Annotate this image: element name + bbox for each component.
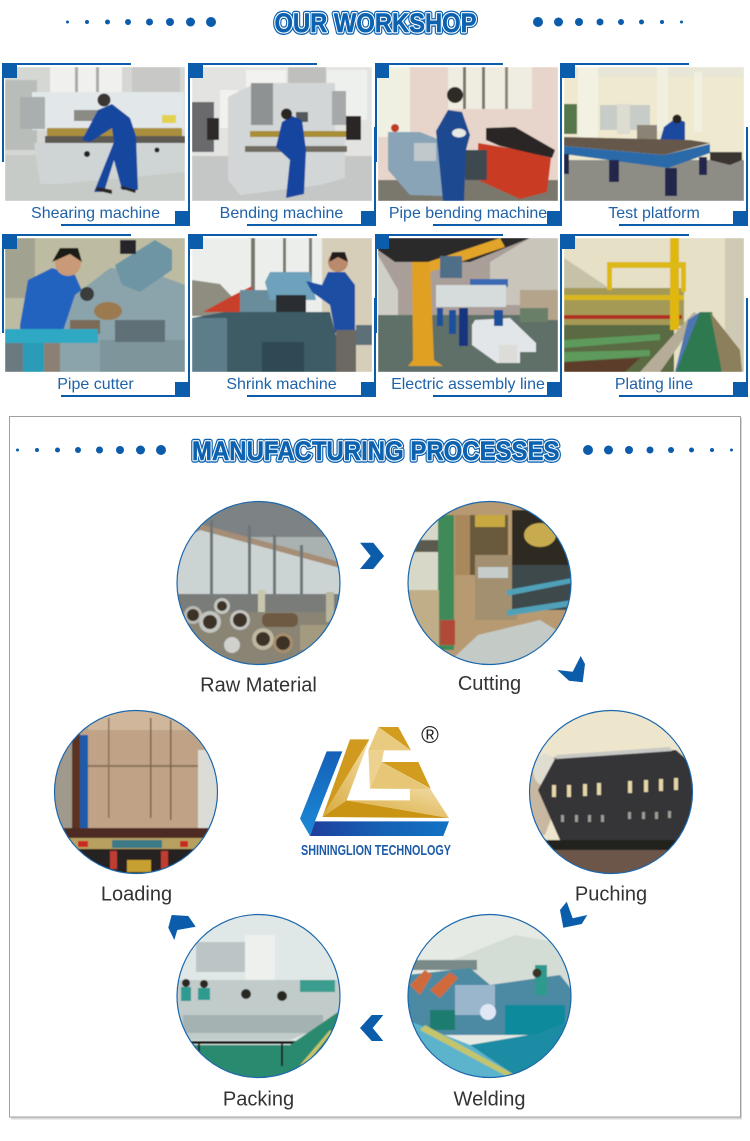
- caption: Electric assembly line: [391, 376, 545, 393]
- step: puching: [529, 710, 694, 906]
- card: bending machine: [188, 63, 376, 226]
- decorative dots: processes heading left: [16, 445, 166, 455]
- photo: electric assembly line: [378, 238, 558, 372]
- title: our workshop: OUR WORKSHOP: [274, 8, 476, 38]
- frame: electric assembly line: [375, 234, 562, 397]
- title: manufacturing processes: MANUFACTURING PROCESSES: [192, 436, 560, 466]
- caption: Shrink machine: [226, 376, 337, 393]
- card: pipe cutter: [2, 234, 190, 397]
- arrow: cutting to puching: [557, 656, 585, 682]
- label: Welding: [454, 1088, 525, 1110]
- title: manufacturing processes: MANUFACTURING PROCESSES: [192, 436, 560, 466]
- frame: shearing machine: [2, 63, 190, 226]
- photo: cutting: [407, 501, 572, 666]
- card: pipe bending machine: [375, 63, 562, 226]
- label: Packing: [223, 1088, 294, 1110]
- frame: pipe bending machine: [375, 63, 562, 226]
- card: shearing machine: [2, 63, 190, 226]
- title: our workshop: OUR WORKSHOP: [274, 8, 476, 38]
- photo: plating line: [564, 238, 744, 372]
- photo: shearing machine: [5, 67, 185, 201]
- photo: pipe cutter: [5, 238, 185, 372]
- card: shrink machine: [188, 234, 376, 397]
- photo: puching: [529, 710, 694, 875]
- caption: Pipe cutter: [57, 376, 134, 393]
- arrow: packing to loading: [168, 915, 196, 940]
- title: our workshop: OUR WORKSHOP: [274, 8, 476, 38]
- photo: raw material: [176, 501, 341, 666]
- caption: Test platform: [608, 205, 700, 222]
- frame: bending machine: [188, 63, 376, 226]
- label: Raw Material: [200, 674, 317, 696]
- registered mark: ®: [421, 722, 439, 749]
- step: raw material: [176, 501, 341, 696]
- frame: test platform: [560, 63, 748, 226]
- photo: shrink machine: [192, 238, 372, 372]
- decorative dots: workshop heading right: [533, 17, 683, 27]
- panel: manufacturing processes: [10, 416, 742, 1120]
- decorative dots: processes heading right: [583, 445, 733, 455]
- arrow: puching to welding: [560, 902, 587, 928]
- step: cutting: [407, 501, 572, 695]
- step: packing: [176, 914, 341, 1110]
- photo: pipe bending machine: [378, 67, 558, 201]
- decorative dots: workshop heading left: [66, 17, 216, 27]
- step: welding: [407, 914, 572, 1110]
- logo wordmark: SHININGLION TECHNOLOGY: [301, 842, 451, 859]
- photo: bending machine: [192, 67, 372, 201]
- caption: Plating line: [615, 376, 693, 393]
- photo: loading: [54, 710, 219, 875]
- frame: shrink machine: [188, 234, 376, 397]
- caption: Shearing machine: [31, 205, 160, 222]
- caption: Pipe bending machine: [389, 205, 547, 222]
- card: electric assembly line: [375, 234, 562, 397]
- card: plating line: [560, 234, 748, 397]
- frame: pipe cutter: [2, 234, 190, 397]
- frame: plating line: [560, 234, 748, 397]
- arrow: raw material to cutting: [360, 543, 384, 569]
- step: loading: [54, 710, 219, 906]
- arrow: welding to packing: [360, 1015, 383, 1041]
- label: Cutting: [458, 673, 521, 695]
- logo: shininglion technology: [300, 722, 451, 859]
- caption: Bending machine: [220, 205, 343, 222]
- photo: packing: [176, 914, 341, 1079]
- photo: test platform: [564, 67, 744, 201]
- photo: welding: [407, 914, 572, 1079]
- label: Loading: [101, 884, 172, 906]
- card: test platform: [560, 63, 748, 226]
- label: Puching: [575, 884, 647, 906]
- title: manufacturing processes: MANUFACTURING PROCESSES: [192, 436, 560, 466]
